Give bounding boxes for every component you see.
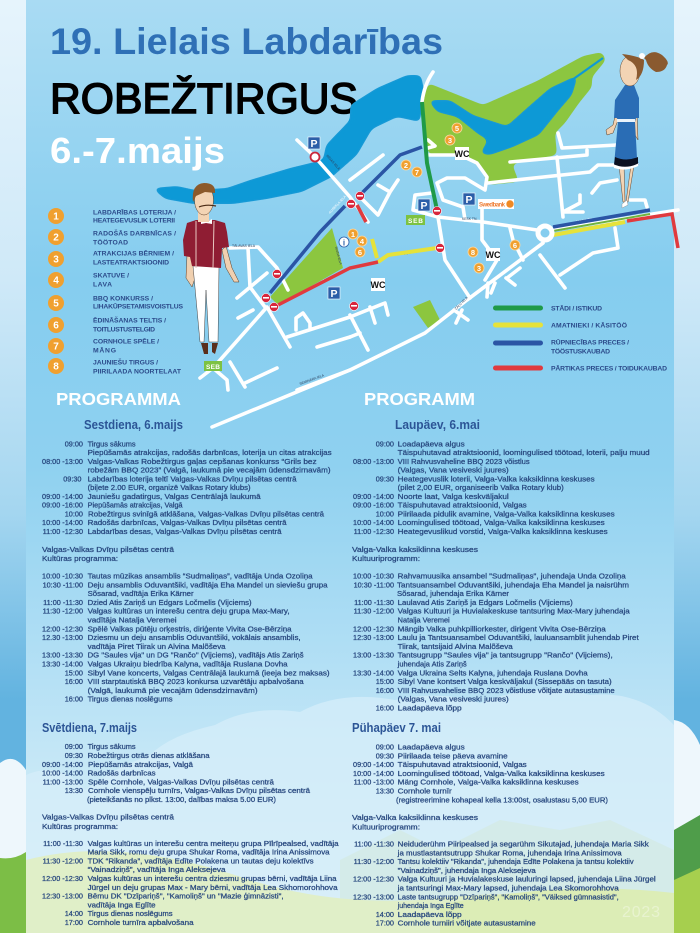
Sunday market schedule (Latvian): Piepūšamās atrakcijas, Valgā xyxy=(88,760,194,769)
Saturday culture programme (Latvian): vadītāja Piret Tiirak un Alvina Malõševa xyxy=(88,642,227,651)
legend item 4: SKATUVE / xyxy=(93,272,129,280)
Sunday culture programme (Latvian): Valgas kultūras un interešu centra dziesmu grupas bērni, vadītāja Liina xyxy=(88,874,338,883)
Saturday market schedule (Latvian): Piepūšamās atrakcijas, radošās darbnīcas, loterija un citas atrakcijas xyxy=(88,448,332,457)
street names: RĪGAS IELA xyxy=(325,154,341,171)
street names: ZĀĻU IELA xyxy=(454,295,469,311)
Sunday market schedule (Latvian): 10:00 -14:00 xyxy=(42,769,83,778)
legend item 2: RADOŠĀS DARBNĪCAS / xyxy=(93,228,176,238)
legend item 6: ĒDINĀŠANAS TELTIS / xyxy=(93,316,166,324)
Saturday culture programme (Estonian): 11:30 -12:00 xyxy=(354,607,394,616)
legend item 4 xyxy=(48,272,129,288)
title: 19. Lielais Labdarības: 19. Lielais Labdarības xyxy=(50,21,443,62)
Sunday culture programme (Latvian): Valgas-Valkas Dvīņu pilsētas centrā xyxy=(42,812,175,822)
Sunday market schedule (Estonian): 09:00 xyxy=(376,742,394,752)
Saturday market schedule (Estonian): Loadapäeva algus xyxy=(398,440,465,448)
Saturday culture programme (Latvian): 16:00 xyxy=(65,677,83,686)
Saturday market schedule (Estonian): Heategevuslikud vorstid, Valga-Valka kaksiklinna keskuses xyxy=(398,527,608,536)
Saturday culture programme (Latvian): Kultūras programma: xyxy=(42,554,118,563)
legend item 6 xyxy=(48,316,166,334)
Saturday culture programme (Latvian): 15:00 xyxy=(65,668,83,677)
Saturday market schedule (Latvian): Labdarības loterija teltī Valgas-Valkas Dvīņu pilsētas centrā xyxy=(88,474,298,484)
Sunday culture programme (Estonian): 11:00 -11:30 xyxy=(354,840,394,848)
background clouds and hills xyxy=(26,689,674,933)
Sunday market schedule (Latvian): 09:00 -14:00 xyxy=(42,760,83,769)
legend item 5: BBQ KONKURSS / xyxy=(93,296,153,302)
Saturday culture programme (Latvian) xyxy=(42,545,330,704)
legend item 8: PIIRILAADA NOORTELAAT xyxy=(93,368,182,376)
legend item 3: 3 xyxy=(53,254,59,266)
Saturday market schedule (Latvian): 09:00 -16:00 xyxy=(42,501,83,510)
Sunday culture programme (Latvian): “Vainadziņš”, vadītāja Inga Aleksejeva xyxy=(88,865,227,874)
street network xyxy=(200,72,678,427)
numbered map markers xyxy=(348,123,520,273)
SEB bank signs: SEB xyxy=(408,218,423,225)
Saturday culture programme (Estonian): VIII Rahvusvahelise BBQ 2023 võistluse võitjate autasustamine xyxy=(398,686,615,695)
street names: AUSEKĻA IEL xyxy=(403,248,425,256)
Sunday culture programme (Latvian): Valgas kultūras un interešu centra meiteņu grupa Pīlrīpealsed, vadītāja xyxy=(88,839,340,848)
Saturday culture programme (Latvian): Spēlē Valkas pūtēju orķestris, diriģente Vivita Ose-Bērziņa xyxy=(88,624,293,633)
Sunday market schedule (Estonian) xyxy=(353,742,608,804)
Sunday culture programme (Estonian): 14:00 xyxy=(376,910,394,919)
illustration: man xyxy=(183,183,239,354)
street names: TĀLAVAS IELA xyxy=(232,244,256,248)
street names: KESK TN. xyxy=(462,217,477,221)
numbered map markers: 5 xyxy=(455,124,459,133)
Saturday market schedule (Latvian): 10:00 xyxy=(65,510,83,518)
Sunday market schedule (Estonian): 09:30 xyxy=(376,751,394,760)
Saturday market schedule (Estonian): 08:00 -13:00 xyxy=(353,457,394,466)
no-parking sign xyxy=(310,152,320,162)
Saturday culture programme (Estonian): Kultuuriprogramm: xyxy=(352,554,420,563)
Sunday market schedule (Latvian): 09:30 xyxy=(65,751,83,760)
legend item 8: 8 xyxy=(53,362,59,372)
Sunday culture programme (Estonian): "Vainadziņš", juhendaja Inga Aleksejeva xyxy=(398,866,537,875)
heading: Programm: PROGRAMM xyxy=(364,389,475,409)
Saturday market schedule (Latvian): Radošās darbnīcas, Valgas-Valkas Dvīņu pilsētas centrā xyxy=(88,518,288,527)
Sunday culture programme (Latvian): 12:30 -13:00 xyxy=(42,892,83,901)
Saturday market schedule (Latvian): 09:00 -14:00 xyxy=(42,492,83,501)
Saturday culture programme (Estonian): 10:30 -11:00 xyxy=(354,580,394,589)
heading: Svētdiena: Svētdiena, 7.maijs xyxy=(42,721,137,735)
Saturday culture programme (Estonian): 16:00 xyxy=(376,686,394,695)
Saturday culture programme (Latvian): (Valgā, laukumā pie vecajām ūdensdzirnavām) xyxy=(88,686,258,695)
Saturday culture programme (Estonian): Valga-Valka kaksiklinna keskuses xyxy=(352,545,478,554)
legend item 7: 7 xyxy=(53,342,59,352)
route key: industrial goods xyxy=(493,338,629,356)
route key: crafts xyxy=(493,320,627,330)
Saturday culture programme (Estonian): Mängib Valka puhkpilliorkester, dirigent Vivita Ose-Bērziņa xyxy=(398,624,607,633)
Saturday market schedule (Latvian): Robežtirgus svinīgā atklāšana, Valgas-Valkas Dvīņu pilsētas centrā xyxy=(88,510,325,518)
Saturday culture programme (Latvian): 16:00 xyxy=(65,695,83,704)
numbered map markers: 1 xyxy=(351,230,355,239)
Saturday culture programme (Latvian): 12.30 -13:00 xyxy=(42,633,83,642)
Saturday culture programme (Estonian) xyxy=(352,545,639,712)
street names: RĪGAS IELA xyxy=(321,272,340,284)
Saturday culture programme (Latvian): 10:00 -10:30 xyxy=(42,572,83,580)
Saturday culture programme (Estonian): (Valgas, Vana vesiveski juures) xyxy=(398,695,509,704)
Sunday culture programme (Latvian): vadītāja Inga Eglīte xyxy=(88,900,156,909)
Sunday culture programme (Latvian): Jürgel un deju grupas Max - Mary bērni, vadītāja Lea Skhomorohhova xyxy=(88,883,339,892)
street names: AUSEKĻA IELA xyxy=(328,194,347,215)
title: Robežtirgus: ROBEŽTIRGUS xyxy=(50,75,358,123)
Saturday market schedule (Estonian): Loomingulised töötoad, Valga-Valka kaksiklinna keskuses xyxy=(398,518,605,527)
dates: 6.-7.maijs xyxy=(50,130,225,171)
legend item 5: LIHAKŪPSETAMISVOISTLUS xyxy=(93,302,183,310)
Saturday culture programme (Latvian): 10:30 -11:00 xyxy=(43,580,83,589)
info sign: i xyxy=(343,238,345,248)
market route: blue (industrial goods) xyxy=(270,147,650,293)
legend item 5: 5 xyxy=(53,298,59,310)
Saturday market schedule (Latvian): 09:30 xyxy=(63,474,82,484)
market route: green stripe east xyxy=(553,214,650,231)
Sunday market schedule (Latvian): Tirgus sākums xyxy=(88,742,136,751)
legend: market route colours xyxy=(493,304,667,372)
Saturday market schedule (Latvian): 09:00 xyxy=(65,440,83,448)
Saturday culture programme (Estonian): Valga Ukraina Selts Kalyna, juhendaja Ruslana Dovha xyxy=(398,668,589,677)
SEB bank signs: SEB xyxy=(206,364,220,371)
Saturday market schedule (Estonian): (pilet 2,00 EUR, organiseerib Valka Rotary klub) xyxy=(398,483,564,492)
river: left branch xyxy=(152,75,424,204)
Saturday market schedule (Estonian): 11:00 -12:30 xyxy=(354,527,394,536)
Saturday culture programme (Latvian): DG "Saules vija" un DG "Rančo" (Vijciems), vadītājs Atis Zariņš xyxy=(88,651,304,660)
Sunday market schedule (Estonian): Laadapäeva algus xyxy=(398,742,465,752)
Sunday culture programme (Estonian): Laste tantsugrupp "Dzīpariņš", "Kamoliņš", "Väiksed gümnasistid", xyxy=(398,892,619,901)
heading: Pühapäev: Pühapäev 7. mai xyxy=(352,721,441,735)
SEB bank signs xyxy=(204,215,425,371)
Saturday market schedule (Latvian): Valgas-Valkas Robežtirgus gaļas cepšanas konkurss “Grils bez xyxy=(88,457,317,466)
Sunday market schedule (Latvian): (pieteikšanās no plkst. 13:00, dalības maksa 5.00 EUR) xyxy=(87,795,276,804)
Sunday culture programme (Estonian): Laadapäeva lõpp xyxy=(398,910,462,919)
Saturday culture programme (Estonian): 12:30 -13:00 xyxy=(353,633,394,642)
Saturday market schedule (Estonian): Täispuhutavad atraktsioonid, Valgas xyxy=(398,501,527,510)
Saturday market schedule (Latvian): Piepūšamās atrakcijas, Valgā xyxy=(88,501,184,510)
legend item 4: LAVA xyxy=(93,282,112,288)
Sunday market schedule (Latvian): Spēle Cornhole, Valgas-Valkas Dvīņu pilsētas centrā xyxy=(88,777,275,786)
street names: JAAMA TN. xyxy=(575,217,593,224)
Sunday culture programme (Estonian): Kultuuriprogramm: xyxy=(352,822,420,832)
Saturday market schedule (Latvian): Labdarības desas, Valgas-Valkas Dvīņu pilsētas centrā xyxy=(88,527,283,536)
route key: industrial goods: RŪPNIECĪBAS PRECES / xyxy=(551,338,629,346)
Saturday market schedule (Estonian): Täispuhutavad atraktsioonid, loomingulised töötoad, loterii, palju muud xyxy=(398,448,650,457)
Saturday culture programme (Estonian): Rahvamuusika ansambel "Sudmaliņas", juhendaja Unda Ozoliņa xyxy=(398,572,627,580)
Sunday market schedule (Estonian): Piirilaada teise päeva avamine xyxy=(398,751,508,760)
small green area xyxy=(413,300,440,328)
legend item 3: LASTEATRAKTSIOONID xyxy=(93,260,169,266)
street names: SEMINĀRA IELA xyxy=(299,373,325,386)
parking signs: P xyxy=(465,194,473,206)
map xyxy=(152,52,678,427)
info sign xyxy=(339,237,349,248)
market route: yellow (crafts) xyxy=(372,222,625,262)
Sunday market schedule (Estonian): Loomingulised töötoad, Valga-Valka kaksiklinna keskuses xyxy=(398,769,605,778)
legend: numbered points of interest xyxy=(48,208,183,376)
toilets: WC xyxy=(370,280,386,290)
Saturday culture programme (Latvian): 13:00 -13:30 xyxy=(42,651,83,660)
Saturday market schedule (Estonian): Noorte laat, Valga keskväljakul xyxy=(398,492,509,501)
toilets: WC xyxy=(454,149,470,159)
Saturday market schedule (Latvian): (biļete 2.00 EUR, organizē Valkas Rotary klubs) xyxy=(88,483,251,492)
Saturday culture programme (Latvian): VIII starptautiskā BBQ 2023 konkursa uzvarētāju apbalvošana xyxy=(88,677,305,686)
legend item 3 xyxy=(48,250,174,267)
Saturday culture programme (Estonian): 15:00 xyxy=(376,677,394,686)
Sunday market schedule (Estonian): Mäng Cornhole, Valga-Valka kaksiklinna keskuses xyxy=(398,778,579,787)
legend item 1: 1 xyxy=(53,212,59,222)
green triangle park xyxy=(270,228,343,305)
Saturday culture programme (Latvian): Valgas kultūras un interešu centra deju grupa Max-Mary, xyxy=(88,607,290,616)
parking signs: P xyxy=(330,288,338,300)
Saturday culture programme (Estonian): 11:00 -11:30 xyxy=(354,598,394,607)
Sunday culture programme (Latvian): 17:00 xyxy=(65,918,83,927)
Sunday market schedule (Latvian): Robežtirgus otrās dienas atklāšana xyxy=(88,751,211,760)
Saturday market schedule (Estonian): 09:30 xyxy=(376,474,394,484)
Sunday market schedule (Latvian): Cornhole vienspēļu turnīrs, Valgas-Valkas Dvīņu pilsētas centrā xyxy=(88,786,311,795)
Sunday market schedule (Latvian): 09:00 xyxy=(65,742,83,751)
Sunday culture programme (Estonian): 12:30 -13:00 xyxy=(353,892,394,901)
Saturday culture programme (Estonian): Natalja Veremei xyxy=(398,616,450,624)
Saturday culture programme (Estonian): 13:00 -13:30 xyxy=(353,651,394,660)
Sunday culture programme (Estonian): ja tantsuringi Max-Mary lapsed, juhendaja Lea Skomorohhova xyxy=(397,884,620,892)
Saturday market schedule (Estonian): VIII Rahvusvaheline BBQ 2023 võistlus xyxy=(398,457,530,466)
Sunday culture programme (Estonian): Valga Kultuuri ja Huvialakeskuse lauluringi lapsed, juhendaja Liina Jürgel xyxy=(398,875,656,884)
Saturday market schedule (Latvian): robežām BBQ 2023” (Valgā, laukumā pie vecajām ūdensdzirnavām) xyxy=(88,466,331,475)
Saturday culture programme (Estonian): 10:00 -10:30 xyxy=(353,572,394,580)
Saturday culture programme (Latvian): Dziesmu un deju ansamblis Oduvantšiki, vokālais ansamblis, xyxy=(88,633,301,642)
Saturday market schedule (Estonian) xyxy=(353,440,650,536)
Saturday culture programme (Estonian): Tantsuansambel Oduvantšiki, juhendaja Eha Mandel ja naisrühm xyxy=(397,580,629,589)
route key: plants: STĀDI / ISTIKUD xyxy=(551,304,602,312)
Saturday culture programme (Latvian): Valgas Ukraiņu biedrība Kalyna, vadītāja Ruslana Dovha xyxy=(88,660,289,668)
legend item 7: MĀNG xyxy=(93,346,116,354)
Sunday culture programme (Estonian) xyxy=(352,813,656,928)
Sunday culture programme (Estonian): 11:30 -12:00 xyxy=(354,857,394,866)
Sunday culture programme (Estonian): Cornhole turniiri võitjate autasustamine xyxy=(398,919,536,928)
toilets xyxy=(370,147,501,291)
route key: crafts: AMATNIEKI / KĀSITÖÖ xyxy=(551,320,627,330)
Sunday culture programme (Latvian): Kultūras programma: xyxy=(42,822,118,831)
Saturday market schedule (Estonian): 09:00 -14:00 xyxy=(353,492,394,501)
numbered map markers: 7 xyxy=(415,168,419,177)
Saturday market schedule (Latvian): Jauniešu gadatirgus, Valgas Centrālajā laukumā xyxy=(88,492,262,501)
legend item 2 xyxy=(48,228,176,246)
Swedbank sign xyxy=(478,199,514,209)
Sunday culture programme (Estonian): Neiduderühm Piiripealsed ja segarühm Sikutajad, juhendaja Maria Sikk xyxy=(398,840,649,848)
Saturday culture programme (Estonian): Laulavad Atis Zariņš ja Edgars Ločmelis (Vijciems) xyxy=(398,598,573,607)
numbered map markers: 8 xyxy=(471,248,475,257)
legend item 5 xyxy=(48,295,183,311)
Saturday culture programme (Latvian): Tirgus dienas noslēgums xyxy=(88,695,173,704)
Saturday market schedule (Latvian) xyxy=(42,440,332,536)
heading: Laupäev: Laupäev, 6.mai xyxy=(395,418,480,432)
Sunday market schedule (Estonian): 09:00 -14:00 xyxy=(353,760,394,769)
Saturday culture programme (Estonian): Sibyl Vane kontsert Valga keskväljakul (Sissepääs on tasuta) xyxy=(398,677,612,686)
Saturday culture programme (Latvian): 13:30 -14:00 xyxy=(42,660,83,668)
legend item 1: HEATEGEVUSLIK LOTERII xyxy=(93,218,175,224)
parking signs: P xyxy=(310,138,318,150)
Saturday culture programme (Latvian): Sibyl Vane koncerts, Valgas Centrālajā laukumā (ieeja bez maksas) xyxy=(88,668,330,677)
route key: food xyxy=(493,364,667,372)
Saturday culture programme (Estonian): juhendaja Atis Zariņš xyxy=(397,660,467,668)
numbered map markers: 3 xyxy=(448,136,452,145)
numbered map markers: 6 xyxy=(513,241,517,250)
Saturday culture programme (Latvian): 12:00 -12:30 xyxy=(42,624,83,633)
legend item 1: LABDARĪBAS LOTERIJA / xyxy=(93,208,176,216)
legend item 1 xyxy=(48,208,176,224)
legend item 7 xyxy=(48,338,159,354)
illustration: woman xyxy=(606,52,668,208)
Saturday culture programme (Latvian): Deju ansamblis Oduvantšiki, vadītāja Eha Mandel un sieviešu grupa xyxy=(88,580,329,589)
legend item 8: JAUNIEŠU TIRGUS / xyxy=(93,358,158,366)
Saturday culture programme (Estonian): Laulu ja Tantsuansambel Oduvantšiki, lauluansamblit juhendab Piret xyxy=(398,633,639,642)
Saturday market schedule (Latvian): Tirgus sākums xyxy=(88,440,136,448)
Sunday market schedule (Latvian) xyxy=(42,742,311,804)
Saturday culture programme (Estonian): 16:00 xyxy=(376,704,394,712)
Sunday market schedule (Estonian): 13:30 xyxy=(376,786,394,796)
Sunday culture programme (Latvian): Bērnu DK "Dzīpariņš", "Kamoliņš" un "Mazie ģimnāzisti", xyxy=(88,892,284,901)
Saturday market schedule (Estonian): Heategevuslik loterii, Valga-Valka kaksiklinna keskuses xyxy=(398,474,595,484)
Sunday market schedule (Latvian): 11:00 -13:00 xyxy=(43,777,83,786)
Saturday culture programme (Estonian): Tantsugrupp "Saules vija" ja tantsugrupp "Rančo" (Vijciems), xyxy=(398,651,613,660)
Saturday culture programme (Estonian): 13:30 -14:00 xyxy=(353,668,394,677)
numbered map markers: 4 xyxy=(360,237,365,246)
Sunday culture programme (Estonian): Tantsu kolektiiv "Rikanda", juhendaja Edīte Polakena ja tantsu kolektiiv xyxy=(398,857,634,866)
Saturday culture programme (Estonian): Valgas Kultuuri ja Huvialakeskuse tantsuring Max-Mary juhendaja xyxy=(398,607,631,616)
Sunday culture programme (Latvian): 14:00 xyxy=(65,909,83,918)
market route: green (plants) xyxy=(422,102,437,210)
legend item 6: 6 xyxy=(53,320,59,332)
street names: RAIŅA IELA xyxy=(334,246,343,266)
legend item 2: 2 xyxy=(53,232,59,244)
Saturday culture programme (Latvian): vadītāja Natalja Veremei xyxy=(88,616,177,624)
parking signs xyxy=(308,137,475,300)
Saturday culture programme (Latvian): 11:30 -12:00 xyxy=(43,607,83,616)
route key: food: PĀRTIKAS PRECES / TOIDUKAUBAD xyxy=(551,364,667,372)
Sunday culture programme (Estonian): 12:00 -12:30 xyxy=(353,875,394,884)
Sunday culture programme (Latvian): Maria Sikk, romu deju grupa Shukar Roma, vadītāja Irina Anissimova xyxy=(88,848,331,857)
legend item 2: TÖÖTOAD xyxy=(93,238,128,246)
market route: red (food) xyxy=(278,205,678,305)
Saturday culture programme (Estonian): Sõsarad, juhendaja Erika Kärner xyxy=(397,589,510,598)
Sunday culture programme (Estonian): Valga-Valka kaksiklinna keskuses xyxy=(352,813,478,822)
heading: Sestdiena: Sestdiena, 6.maijs xyxy=(84,418,183,432)
Saturday market schedule (Latvian): 08:00 -13:00 xyxy=(42,457,83,466)
Sunday market schedule (Latvian): 13:30 xyxy=(65,786,83,795)
Saturday culture programme (Latvian): 11:00 -11:30 xyxy=(43,598,83,607)
legend item 8 xyxy=(48,358,182,376)
Sunday market schedule (Estonian): (registreerimine kohapeal kella 13:00st, osalustasu 5,00 EUR) xyxy=(396,795,608,804)
toilets: WC xyxy=(486,250,501,260)
Saturday culture programme (Latvian): Tautas mūzikas ansamblis “Sudmaliņas”, vadītāja Unda Ozoliņa xyxy=(88,572,314,580)
Sunday culture programme (Estonian): 17:00 xyxy=(376,919,394,928)
legend item 6: TOITLUSTUSTELGID xyxy=(93,326,155,334)
Sunday culture programme (Latvian): TDK “Rikanda”, vadītāja Edīte Polakena un tautas deju kolektīvs xyxy=(88,856,314,865)
Saturday culture programme (Estonian): Tiirak, tantsijaid Alvina Malõševa xyxy=(398,642,514,651)
route key: plants xyxy=(493,304,602,312)
Saturday culture programme (Latvian): Sõsarad, vadītāja Erika Kärner xyxy=(88,589,194,598)
legend item 3: ATRAKCIJAS BĒRNIEM / xyxy=(93,250,174,258)
Saturday market schedule (Latvian): 10:00 -14:00 xyxy=(42,518,83,527)
Sunday market schedule (Estonian): Täispuhutavad atraktsioonid, Valgas xyxy=(398,760,527,769)
route key: industrial goods: TÖÖSTUSKAUBAD xyxy=(551,346,610,356)
no-entry signs xyxy=(262,192,444,312)
parking signs: P xyxy=(420,200,428,212)
Saturday market schedule (Estonian): (Valgas, Vana vesiveski juures) xyxy=(398,466,509,475)
Saturday culture programme (Estonian): 12:00 -12:30 xyxy=(353,624,394,633)
Swedbank sign: Swedbank xyxy=(479,202,506,208)
Saturday culture programme (Latvian): Valgas-Valkas Dvīņu pilsētas centrā xyxy=(42,545,175,554)
park: green area with lake xyxy=(423,52,606,185)
Sunday culture programme (Latvian): 11:00 -11:30 xyxy=(43,839,83,848)
Sunday culture programme (Latvian): 11:30 -12:00 xyxy=(43,856,83,865)
Saturday culture programme (Latvian): Dzied Atis Zariņš un Edgars Ločmelis (Vijciems) xyxy=(88,598,252,607)
Sunday culture programme (Estonian): ja mustlastantsutrupp Shukar Roma, juhendaja Irina Anissimova xyxy=(397,848,623,857)
numbered map markers: 2 xyxy=(404,161,408,170)
Saturday market schedule (Estonian): 10:00 xyxy=(376,510,394,518)
Saturday market schedule (Estonian): Piirilaada pidulik avamine, Valga-Valka kaksiklinna keskuses xyxy=(398,510,615,518)
numbered map markers: 6 xyxy=(358,248,362,257)
Sunday culture programme (Latvian): Cornhole turnīra apbalvošana xyxy=(88,918,195,927)
Sunday market schedule (Estonian): 10:00 -14:00 xyxy=(353,769,394,778)
Sunday culture programme (Estonian): juhendaja Inga Eglīte xyxy=(397,901,464,910)
street names xyxy=(232,154,593,386)
roundabout xyxy=(538,226,552,240)
Sunday market schedule (Estonian): Cornhole turnīr xyxy=(398,786,452,796)
legend item 4: 4 xyxy=(53,276,59,286)
Saturday market schedule (Estonian): 09:00 xyxy=(376,440,394,448)
Sunday market schedule (Latvian): Radošās darbnīcas xyxy=(88,769,156,778)
Sunday market schedule (Estonian): 11:00 -13:00 xyxy=(354,778,394,787)
Sunday culture programme (Latvian) xyxy=(42,812,340,927)
Saturday market schedule (Estonian): 09:00 -16:00 xyxy=(353,501,394,510)
heading: Programma: PROGRAMMA xyxy=(56,389,181,409)
numbered map markers: 3 xyxy=(477,264,481,273)
Saturday culture programme (Estonian): Laadapäeva lõpp xyxy=(398,704,462,712)
Saturday market schedule (Latvian): 11:00 -12:30 xyxy=(43,527,83,536)
Sunday culture programme (Latvian): 12:00 -12:30 xyxy=(42,874,83,883)
legend item 7: CORNHOLE SPĒLE / xyxy=(93,338,159,346)
Saturday market schedule (Estonian): 10:00 -14:00 xyxy=(353,518,394,527)
Sunday culture programme (Latvian): Tirgus dienas noslēgums xyxy=(88,909,173,918)
year watermark: 2023 xyxy=(622,904,660,921)
